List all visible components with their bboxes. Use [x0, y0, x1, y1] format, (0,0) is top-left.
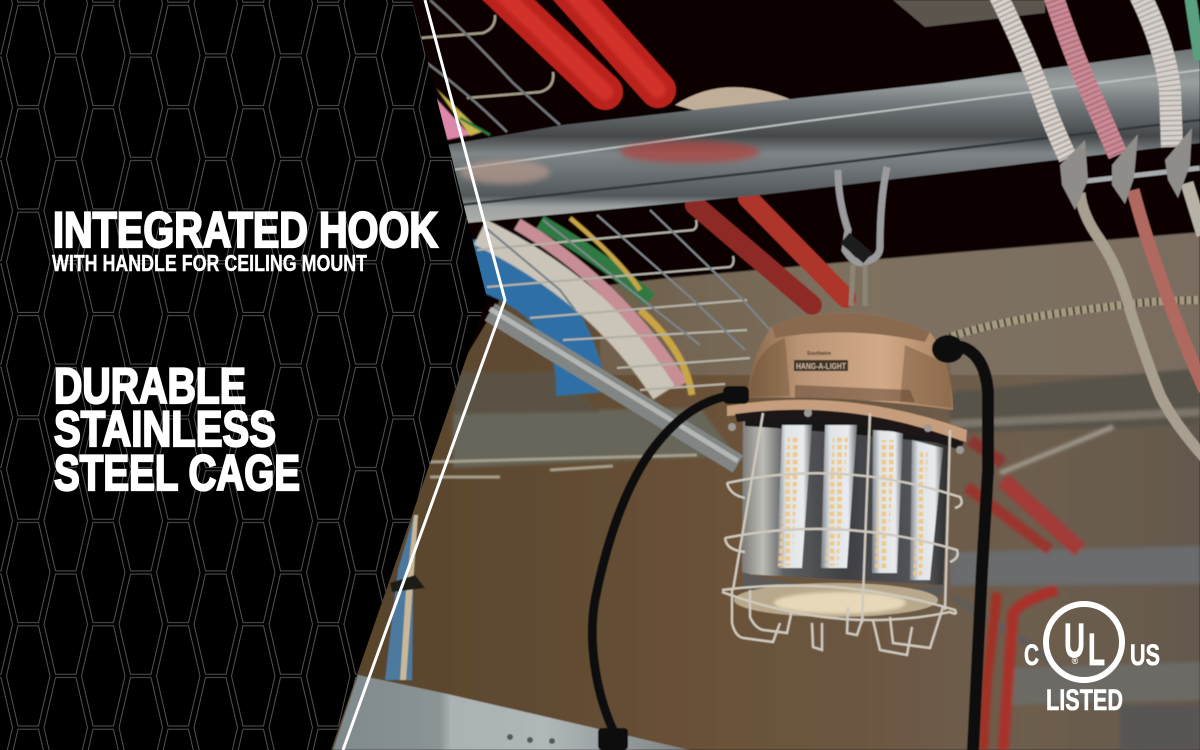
- wire basket upper: [420, 0, 560, 132]
- wire basket diagonals: [486, 210, 770, 350]
- bottom-left steel duct: [333, 675, 690, 750]
- background rails: [453, 368, 1200, 750]
- upper tan wall: [600, 232, 1200, 375]
- dark gaps at top of body: [745, 408, 960, 445]
- black ceiling void: [400, 0, 1200, 750]
- product label: [794, 351, 848, 371]
- UL listed certification mark: U: [1064, 615, 1085, 668]
- product label: Southwire: [807, 351, 831, 357]
- left black panel with hexagon pattern: [0, 0, 487, 750]
- ceiling box top right: [893, 0, 1045, 27]
- UL listed certification mark: ®: [1072, 656, 1079, 666]
- white chevron line: [343, 0, 505, 750]
- red pipes lower: [695, 198, 846, 305]
- heading: integrated hook: INTEGRATED HOOK: [53, 202, 438, 258]
- heading: durable stainless steel cage: STEEL CAGE: [54, 445, 300, 501]
- conduit clamps: [1060, 128, 1200, 210]
- lights on rail lip: [430, 455, 697, 477]
- heading: durable stainless steel cage: STAINLESS: [54, 401, 276, 457]
- hanging light: [722, 167, 967, 655]
- stainless cage wires: [722, 413, 962, 655]
- power cord: [592, 347, 988, 750]
- diagonal steel conduit: [490, 309, 738, 464]
- flexible conduits right: [950, 0, 1200, 458]
- cable bundles: [434, 88, 692, 396]
- cord glands: [723, 386, 749, 404]
- carabiner hook: [838, 167, 887, 306]
- blue cable run lower left: [385, 515, 414, 680]
- UL listed certification mark: [1024, 604, 1160, 717]
- photo: ceiling scene with hanging light: [330, 0, 1200, 750]
- heading: durable stainless steel cage: [54, 358, 300, 501]
- cable bracket: [390, 575, 425, 592]
- red pipes upper: [493, 0, 658, 92]
- heading: durable stainless steel cage: DURABLE: [54, 358, 246, 414]
- dome: [748, 312, 953, 410]
- subheading: handle for ceiling mount: WITH HANDLE FOR CEILING MOUNT: [52, 250, 367, 276]
- bottom glass dish: [742, 572, 945, 600]
- tan curved duct behind pipes: [675, 87, 792, 112]
- LED panels: [777, 425, 943, 580]
- cord grommet: [598, 728, 628, 750]
- flange ring: [727, 400, 967, 442]
- UL listed certification mark: US: [1130, 639, 1160, 672]
- UL listed certification mark: LISTED: [1046, 684, 1123, 717]
- UL listed certification mark: C: [1024, 639, 1039, 672]
- lower brown wall: [330, 300, 1200, 750]
- cage bolts: [728, 409, 964, 454]
- galvanized beam: [447, 48, 1200, 224]
- cage backing and body: [742, 415, 950, 585]
- product label: HANG-A-LIGHT: [796, 362, 846, 371]
- wire basket lower: [477, 220, 750, 390]
- UL listed certification mark: L: [1088, 624, 1105, 675]
